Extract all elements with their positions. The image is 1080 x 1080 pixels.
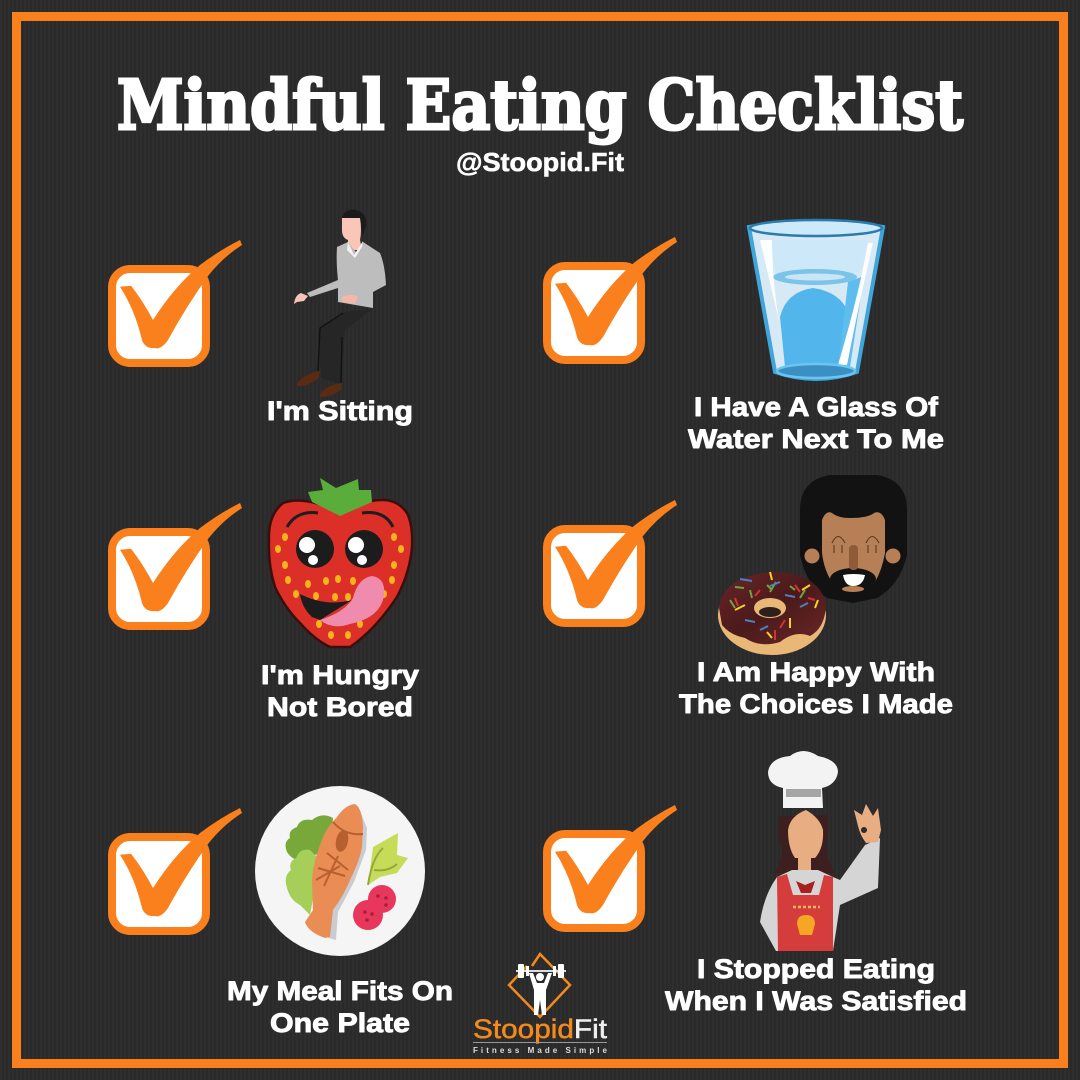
icon: strawberry xyxy=(269,478,412,647)
label: sitting: I'm Sitting xyxy=(267,396,413,426)
logo: StoopidFit: Stoopid Fit xyxy=(473,1014,608,1044)
checkbox: sitting xyxy=(112,240,242,363)
label: happy xyxy=(679,657,953,719)
icon: plate with fish xyxy=(255,786,425,956)
label: happy: The Choices I Made xyxy=(679,689,953,719)
label: hungry xyxy=(261,660,419,722)
label: stopped: When I Was Satisfied xyxy=(665,986,967,1016)
checkbox: stopped xyxy=(547,805,677,928)
handle: @Stoopid.Fit xyxy=(456,147,624,177)
title: Mindful Eating Checklist xyxy=(117,66,964,146)
label: plate: My Meal Fits On xyxy=(227,976,453,1006)
checkbox: plate xyxy=(112,808,242,931)
icon: happy man and donut xyxy=(718,475,907,655)
label: stopped xyxy=(665,954,967,1016)
label: plate: One Plate xyxy=(270,1008,410,1038)
checkbox: water xyxy=(547,237,677,360)
icon: glass of water xyxy=(749,220,883,379)
label: hungry: Not Bored xyxy=(267,692,413,722)
label: happy: I Am Happy With xyxy=(697,657,935,687)
label: water xyxy=(688,392,944,454)
checkbox: hungry xyxy=(112,503,242,626)
icon: chef woman xyxy=(760,751,881,951)
label: stopped: I Stopped Eating xyxy=(697,954,935,984)
label: plate xyxy=(227,976,453,1038)
label: hungry: I'm Hungry xyxy=(261,660,419,690)
logo: StoopidFit xyxy=(473,954,608,1055)
label: water: I Have A Glass Of xyxy=(694,392,939,422)
label: water: Water Next To Me xyxy=(688,424,944,454)
checkbox: happy xyxy=(547,500,677,623)
icon: sitting man xyxy=(294,210,386,397)
logo: StoopidFit: Fitness Made Simple xyxy=(473,1046,608,1055)
